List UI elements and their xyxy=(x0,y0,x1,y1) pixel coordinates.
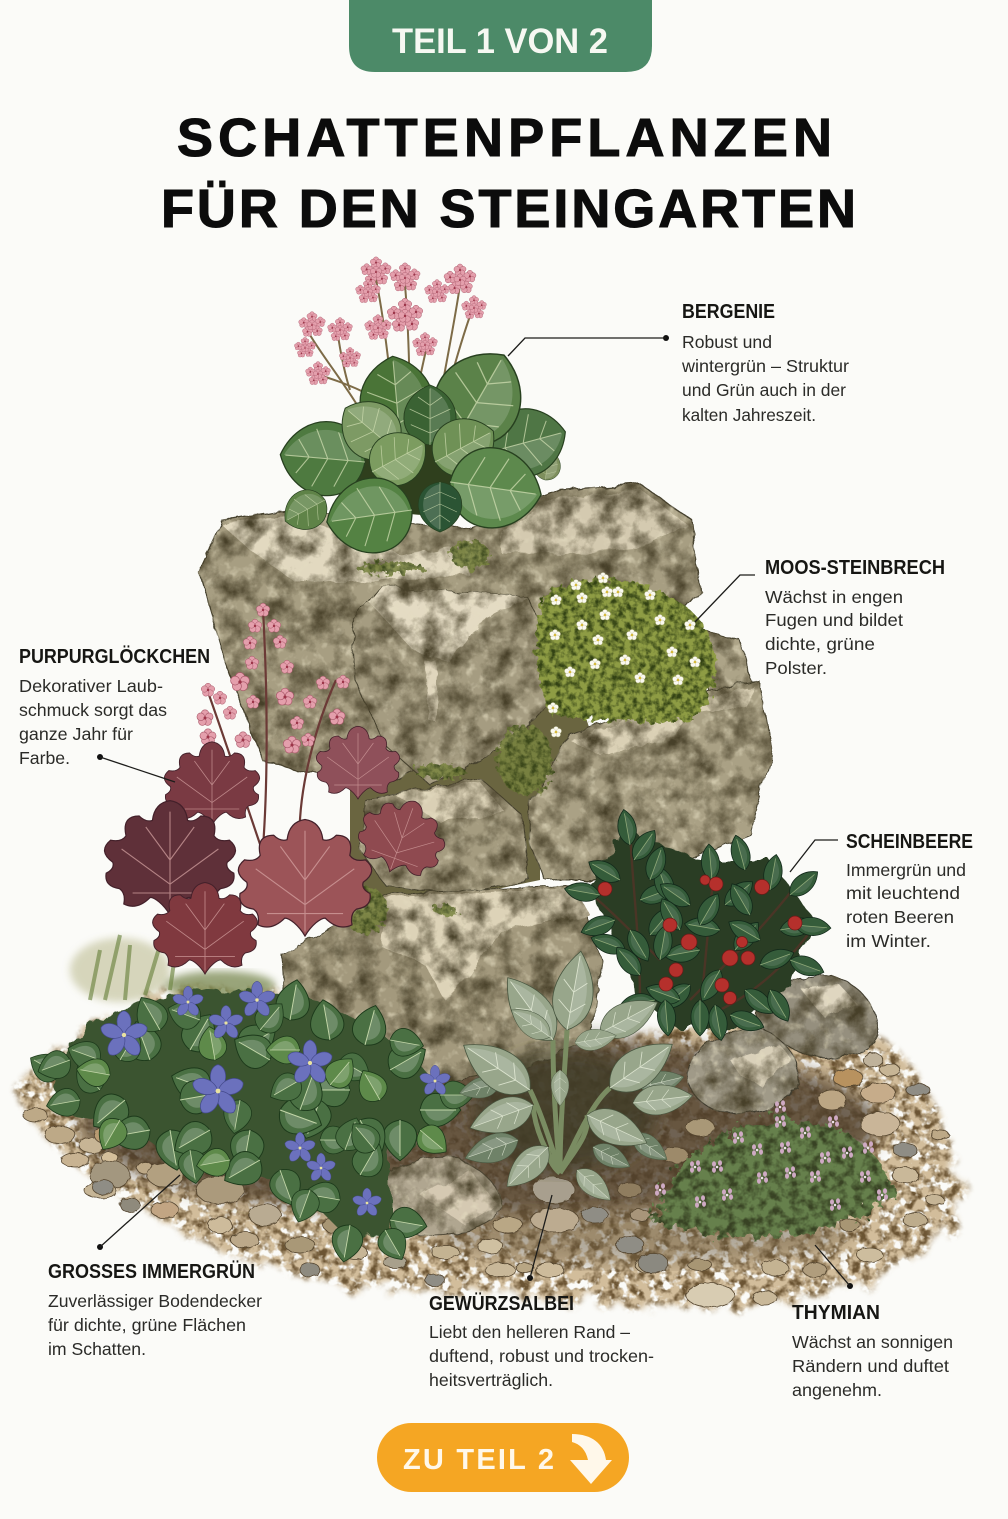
label: Scheinbeere: im Winter. xyxy=(846,931,931,951)
moss patches on rocks xyxy=(343,541,553,934)
label: Großes Immergrün: im Schatten. xyxy=(48,1339,146,1359)
rock: top slab and back xyxy=(199,484,700,780)
illustration: rock pile xyxy=(199,484,878,1235)
plant: Großes Immergrün xyxy=(24,977,474,1266)
rock: stone right xyxy=(755,975,878,1058)
shadow under sage xyxy=(475,1050,655,1170)
label: Scheinbeere: SCHEINBEERE xyxy=(846,831,973,853)
top tab: part 1 of 2: TEIL 1 VON 2 xyxy=(392,22,608,61)
label: Purpurglöckchen: ganze Jahr für xyxy=(19,724,133,744)
label: Gewürzsalbei: heitsverträglich. xyxy=(429,1370,553,1390)
label: Gewürzsalbei: GEWÜRZSALBEI xyxy=(429,1292,574,1315)
grass tufts at left base xyxy=(70,935,275,1002)
leaves xyxy=(105,726,456,974)
button: to part 2 xyxy=(377,1423,629,1492)
label: Bergenie: wintergrün – Struktur xyxy=(681,356,849,376)
label: Bergenie: und Grün auch in der xyxy=(682,380,846,400)
plant: Moos-Steinbrech xyxy=(536,572,715,737)
label: Gewürzsalbei xyxy=(429,1195,654,1390)
flower spikes xyxy=(197,603,350,753)
label: Thymian: THYMIAN xyxy=(792,1302,880,1324)
backing foliage xyxy=(50,990,450,1240)
rock: right small back xyxy=(700,630,755,700)
label: Großes Immergrün xyxy=(48,1175,262,1359)
label: Großes Immergrün: für dichte, grüne Flächen xyxy=(48,1315,246,1335)
illustration: gravel ground xyxy=(18,990,959,1307)
label: Moos-Steinbrech xyxy=(695,557,945,678)
label: Gewürzsalbei: duftend, robust und trocken- xyxy=(429,1346,654,1366)
button: to part 2: ZU TEIL 2 xyxy=(403,1444,554,1476)
rock: central block xyxy=(352,587,552,785)
title: FÜR DEN STEINGARTEN xyxy=(161,179,856,239)
label: Moos-Steinbrech: Wächst in engen xyxy=(765,587,903,607)
label: Gewürzsalbei: Liebt den helleren Rand – xyxy=(429,1322,630,1342)
icon: curved down arrow xyxy=(570,1434,612,1484)
label: Scheinbeere: Immergrün und xyxy=(846,860,966,880)
label: Purpurglöckchen: PURPURGLÖCKCHEN xyxy=(19,645,210,668)
label: Moos-Steinbrech: Fugen und bildet xyxy=(765,610,903,630)
title: SCHATTENPFLANZEN xyxy=(177,108,832,168)
flower clusters xyxy=(294,257,486,385)
plant: Purpurglöckchen xyxy=(105,603,456,974)
label: Purpurglöckchen: Dekorativer Laub- xyxy=(19,676,163,696)
backing foliage xyxy=(590,830,815,1030)
label: Bergenie: Robust und xyxy=(682,332,772,352)
label: Moos-Steinbrech: Polster. xyxy=(765,658,827,678)
label: Bergenie xyxy=(508,301,849,425)
stems xyxy=(530,1030,610,1173)
label: Purpurglöckchen xyxy=(19,645,210,782)
leaves xyxy=(276,334,574,559)
plant: Gewürzsalbei xyxy=(453,948,694,1208)
plant: Thymian xyxy=(650,1100,892,1238)
label: Thymian: Wächst an sonnigen xyxy=(792,1332,953,1352)
label: Thymian: Rändern und duftet xyxy=(792,1356,949,1376)
label: Bergenie: BERGENIE xyxy=(682,301,775,323)
label: Großes Immergrün: Zuverlässiger Bodendecker xyxy=(48,1291,262,1311)
label: Purpurglöckchen: Farbe. xyxy=(19,748,70,768)
label: Thymian: angenehm. xyxy=(792,1380,882,1400)
label: Purpurglöckchen: schmuck sorgt das xyxy=(19,700,167,720)
rock: stone front xyxy=(378,1156,503,1235)
leaf backing xyxy=(355,425,495,515)
rock: stone middle xyxy=(688,1028,800,1113)
label: Scheinbeere xyxy=(790,831,973,951)
mossy shadow behind rocks xyxy=(350,600,590,905)
label: Moos-Steinbrech: MOOS-STEINBRECH xyxy=(765,557,945,579)
flower stems xyxy=(310,275,472,440)
rock: mid block xyxy=(360,778,530,895)
label: Scheinbeere: roten Beeren xyxy=(846,907,954,927)
label: Großes Immergrün: GROSSES IMMERGRÜN xyxy=(48,1260,255,1283)
flower stems xyxy=(208,610,336,860)
title xyxy=(161,108,856,239)
plant: Scheinbeere xyxy=(563,808,832,1042)
rock: lower block xyxy=(282,885,602,1085)
top tab: part 1 of 2 xyxy=(349,0,652,72)
plant: Bergenie xyxy=(276,257,574,559)
label: Scheinbeere: mit leuchtend xyxy=(846,883,960,903)
rock: right block xyxy=(528,682,772,880)
label: Moos-Steinbrech: dichte, grüne xyxy=(765,634,875,654)
label: Bergenie: kalten Jahreszeit. xyxy=(682,405,816,425)
label: Thymian xyxy=(792,1245,953,1400)
